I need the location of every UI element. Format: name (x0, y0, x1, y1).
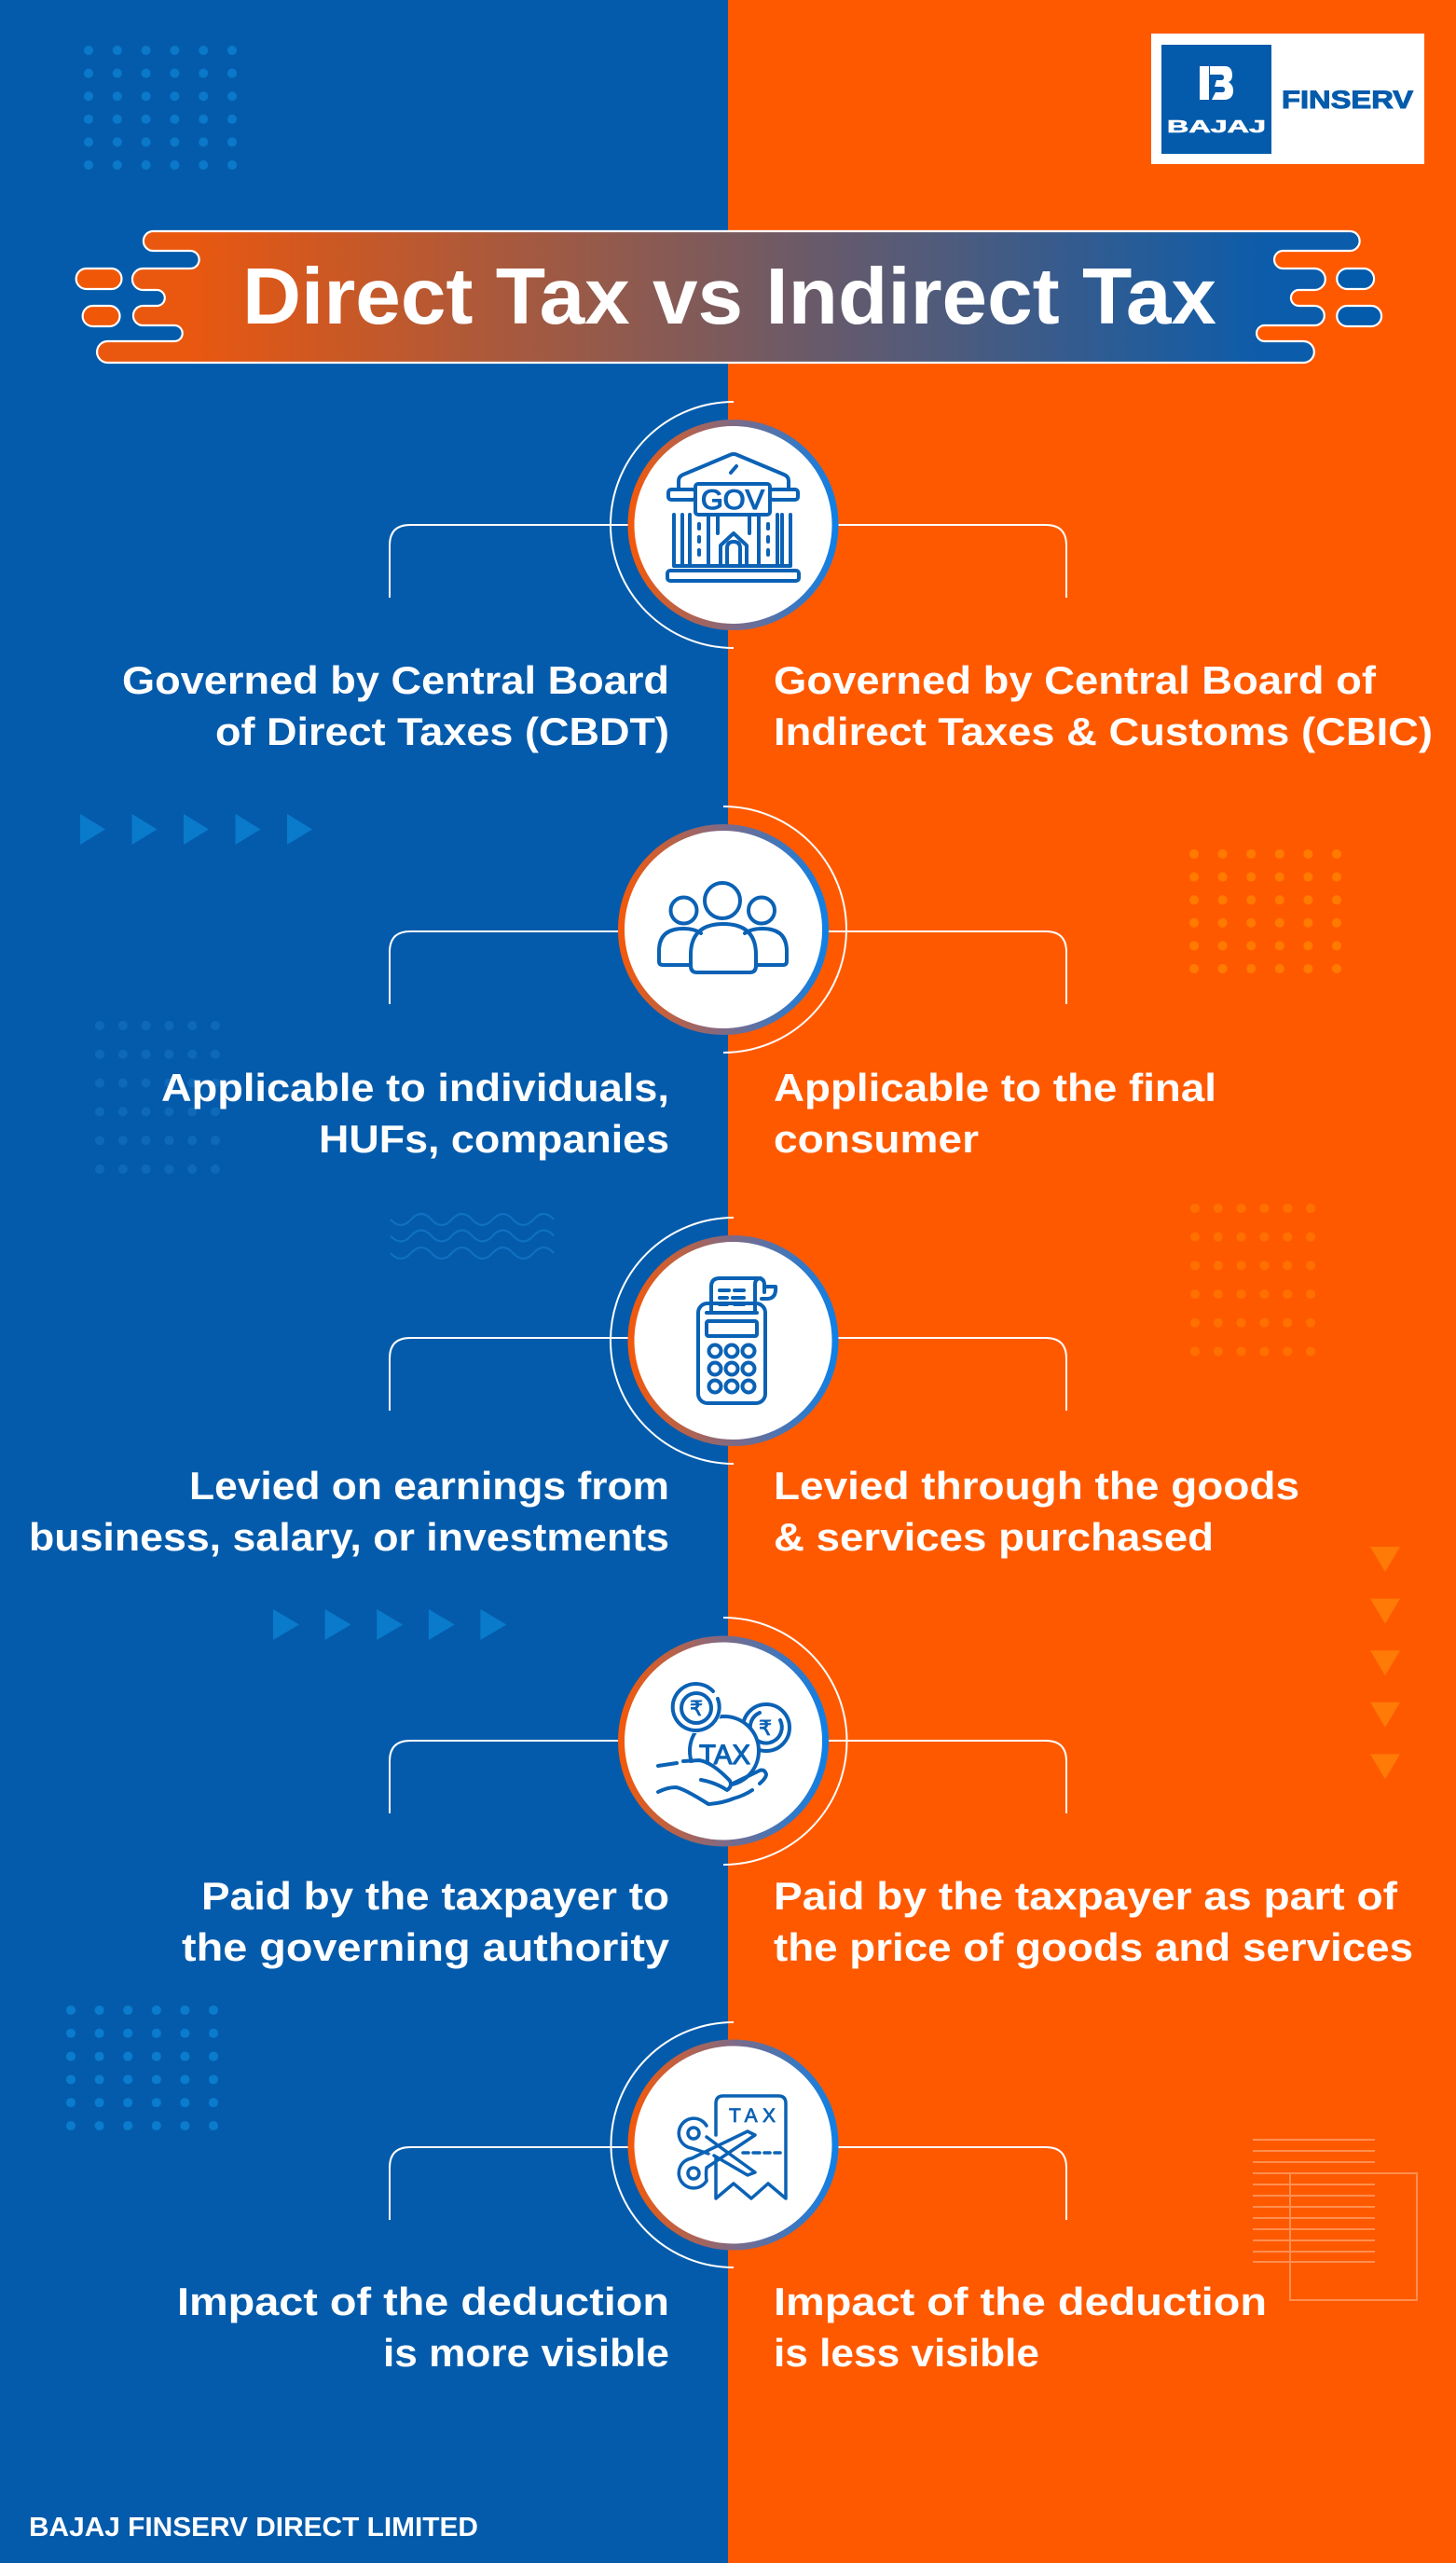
icon: government building: GOV (701, 485, 764, 516)
text: indirect tax applicability: consumer (774, 1117, 979, 1161)
text: direct tax impact: is more visible (383, 2331, 669, 2375)
triangle row: blue upper (80, 814, 312, 845)
triangle row: blue lower (273, 1609, 506, 1640)
icon badge (621, 828, 826, 1031)
dot pattern: left lower (57, 1999, 227, 2137)
connector lines (390, 2147, 1066, 2220)
text: indirect tax payment (774, 1874, 1413, 1969)
logo: Bajaj Finserv (1151, 34, 1424, 164)
text: indirect tax impact (774, 2280, 1267, 2375)
text: direct tax impact: Impact of the deduction (177, 2280, 669, 2323)
dot pattern: orange upper (1180, 843, 1351, 980)
connector lines (390, 1338, 1066, 1411)
orbit arc (611, 402, 734, 648)
text: direct tax applicability (161, 1066, 669, 1161)
connector lines (390, 931, 1066, 1004)
icon badge (631, 2043, 835, 2247)
text: indirect tax levy (774, 1464, 1299, 1559)
icon: government building (667, 454, 799, 581)
text: indirect tax applicability (774, 1066, 1216, 1161)
line and square pattern (1253, 2140, 1417, 2300)
dot pattern: left middle (89, 1012, 227, 1183)
logo: Bajaj Finserv: BAJAJ (1167, 117, 1266, 136)
triangle column: orange (1370, 1547, 1400, 1779)
text: direct tax governance: Governed by Central Board (122, 658, 669, 702)
text: indirect tax governance: Governed by Central Board of (774, 658, 1377, 702)
footer company name: BAJAJ FINSERV DIRECT LIMITED (29, 2513, 478, 2542)
text: direct tax payment: Paid by the taxpayer to (201, 1874, 669, 1918)
panel: indirect tax orange background (728, 0, 1456, 2563)
orbit arc (611, 1218, 734, 1464)
row 2: applicability (161, 806, 1216, 1161)
logo: Bajaj Finserv: FINSERV (1282, 86, 1413, 114)
icon: scissors cutting tax receipt (679, 2096, 786, 2198)
text: direct tax applicability: Applicable to individuals, (161, 1066, 669, 1109)
text: direct tax governance (122, 658, 669, 753)
text: indirect tax levy: Levied through the goods (774, 1464, 1299, 1508)
title banner: Direct Tax vs Indirect Tax (242, 253, 1216, 341)
orbit arc (723, 806, 846, 1053)
text: indirect tax impact: Impact of the deduction (774, 2280, 1267, 2323)
text: direct tax impact (177, 2280, 669, 2375)
title banner (76, 231, 1381, 363)
icon: people group (659, 883, 787, 972)
row 1: governing body (122, 402, 1433, 753)
orbit arc (723, 1618, 846, 1865)
icon: scissors cutting tax receipt: TAX (729, 2105, 776, 2127)
icon: tax coins in hand (652, 1683, 790, 1805)
dot pattern: orange middle (1184, 1194, 1322, 1366)
text: indirect tax impact: is less visible (774, 2331, 1039, 2375)
text: indirect tax governance (774, 658, 1433, 753)
text: direct tax payment: the governing authority (182, 1925, 670, 1969)
dot pattern: top left (75, 39, 246, 176)
wave pattern (391, 1214, 554, 1259)
icon: billing machine (698, 1278, 776, 1403)
icon badge (631, 1238, 835, 1443)
icon badge (631, 423, 835, 627)
text: direct tax levy: Levied on earnings from (189, 1464, 669, 1508)
text: indirect tax payment: the price of goods and services (774, 1925, 1413, 1969)
connector lines (390, 525, 1066, 598)
text: indirect tax applicability: Applicable to the final (774, 1066, 1216, 1109)
text: indirect tax levy: & services purchased (774, 1515, 1214, 1559)
text: direct tax governance: of Direct Taxes (CBDT) (215, 710, 669, 753)
row 5: impact (177, 2022, 1267, 2375)
row 3: levy (29, 1218, 1299, 1559)
orbit arc (611, 2022, 734, 2267)
connector lines (390, 1741, 1066, 1813)
icon badge (621, 1639, 826, 1843)
text: direct tax applicability: HUFs, companies (319, 1117, 669, 1161)
icon: tax coins in hand: TAX (699, 1740, 750, 1771)
row 4: payment (182, 1618, 1413, 1969)
text: direct tax levy: business, salary, or investments (29, 1515, 669, 1559)
text: indirect tax governance: Indirect Taxes & Customs (CBIC) (774, 710, 1433, 753)
text: indirect tax payment: Paid by the taxpayer as part of (774, 1874, 1398, 1918)
text: direct tax payment (182, 1874, 670, 1969)
icon: tax coins in hand: ₹ (690, 1697, 703, 1720)
text: direct tax levy (29, 1464, 669, 1559)
icon: tax coins in hand: ₹ (759, 1716, 772, 1740)
panel: direct tax blue background (0, 0, 728, 2563)
